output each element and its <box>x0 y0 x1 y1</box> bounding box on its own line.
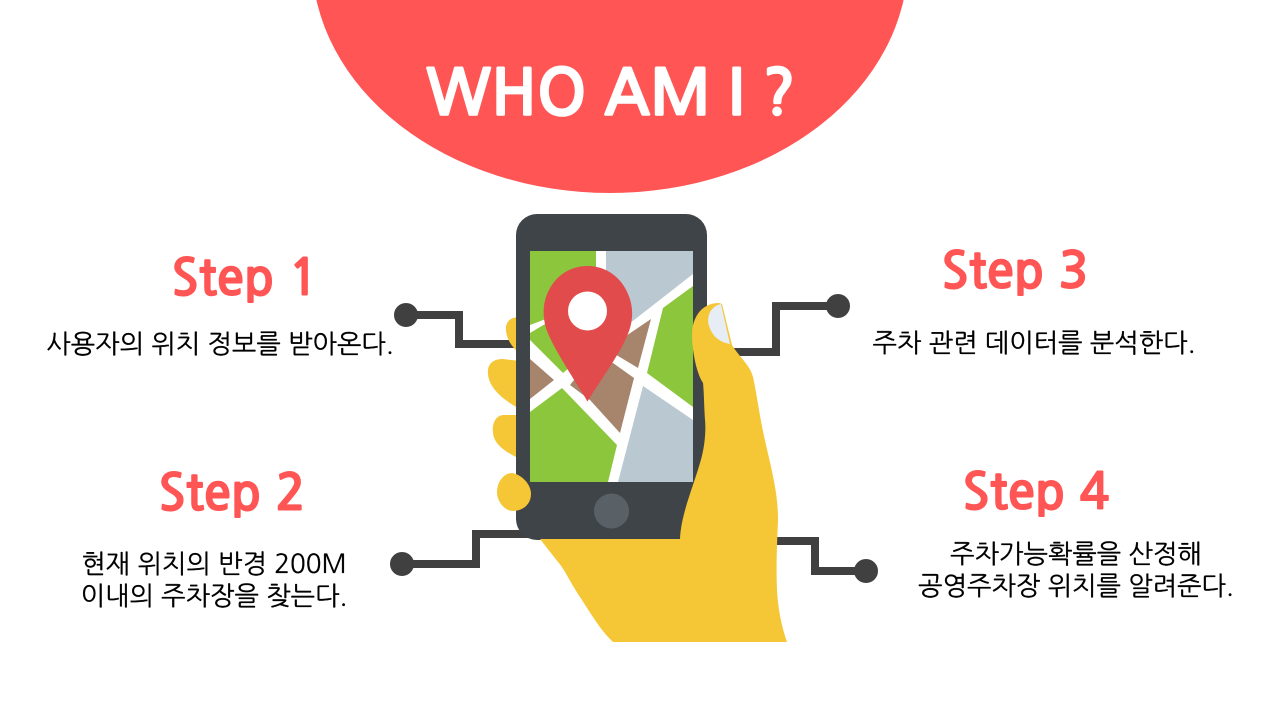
step 2 heading: Step 2 <box>158 469 306 518</box>
step 2 text: 이내의 주차장을 찾는다. <box>81 583 347 609</box>
map on screen <box>530 251 693 482</box>
icon: hand palm and thumb <box>540 303 787 642</box>
phone body <box>516 214 707 540</box>
step 4 text: 주차가능확률을 산정해 <box>950 541 1202 567</box>
map pin <box>544 266 632 402</box>
connector: step 3 <box>730 298 846 352</box>
step 3 text: 주차 관련 데이터를 분석한다. <box>872 330 1196 356</box>
step 4 text: 공영주차장 위치를 알려준다. <box>918 573 1234 599</box>
step 3 heading: Step 3 <box>941 247 1089 296</box>
thumbnail <box>708 304 730 344</box>
step 1 text: 사용자의 위치 정보를 받아온다. <box>46 331 394 357</box>
header red ellipse <box>312 0 908 193</box>
step 4 text <box>918 541 1234 599</box>
connector: step 4 <box>770 541 874 579</box>
step 2 text: 현재 위치의 반경 200M <box>81 551 347 577</box>
icon: hand back fingers <box>488 317 520 459</box>
connector: step 2 <box>394 534 535 572</box>
connector: step 1 <box>398 307 520 344</box>
home button <box>594 494 629 528</box>
icon: phone <box>516 214 707 540</box>
title: WHO AM I ? <box>426 63 796 125</box>
step 4 heading: Step 4 <box>962 468 1110 517</box>
step 1 heading: Step 1 <box>171 254 319 303</box>
icon: front finger <box>497 473 531 511</box>
step 2 text <box>81 551 347 609</box>
